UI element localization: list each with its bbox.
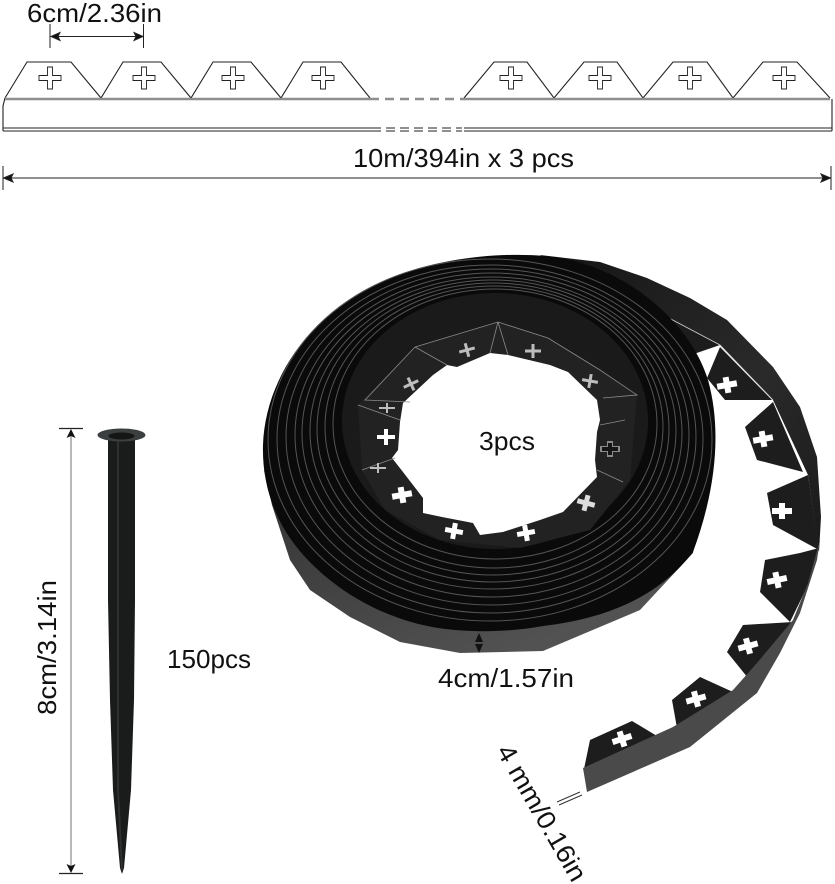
coil: inner plate — [342, 293, 648, 549]
garden stake — [98, 428, 146, 874]
strip thickness label: 4 mm/0.16in — [491, 739, 593, 884]
tail: cross holes — [610, 375, 792, 750]
coil: inner tooth edges — [358, 322, 637, 482]
tail: tooth behind the coil — [640, 300, 720, 356]
coil: outer side skirt — [264, 470, 700, 653]
edging coil — [263, 255, 715, 653]
tail: teeth — [584, 347, 819, 769]
tail: highlight lines — [648, 307, 773, 400]
strip height label: 4cm/1.57in — [438, 663, 574, 693]
coil: stacked rings — [263, 255, 715, 631]
arrow: stake length — [59, 428, 83, 874]
coil: inner cross holes — [370, 341, 620, 542]
arrow: total length — [3, 166, 831, 190]
coil: inner teeth plate — [358, 322, 637, 548]
tail: side face — [583, 540, 820, 792]
tail: upper black band — [540, 255, 821, 552]
edging strip diagram — [3, 62, 832, 131]
coil: white hole — [392, 353, 600, 535]
marker: strip thickness — [557, 792, 582, 805]
coil quantity label: 3pcs — [479, 426, 535, 456]
stake quantity label: 150pcs — [167, 644, 251, 674]
arrow: tooth width — [50, 24, 144, 48]
arrow: strip height — [475, 633, 483, 653]
total length label: 10m/394in x 3 pcs — [353, 143, 574, 173]
free tail of edging coil — [540, 255, 821, 792]
stake length label: 8cm/3.14in — [32, 580, 62, 715]
